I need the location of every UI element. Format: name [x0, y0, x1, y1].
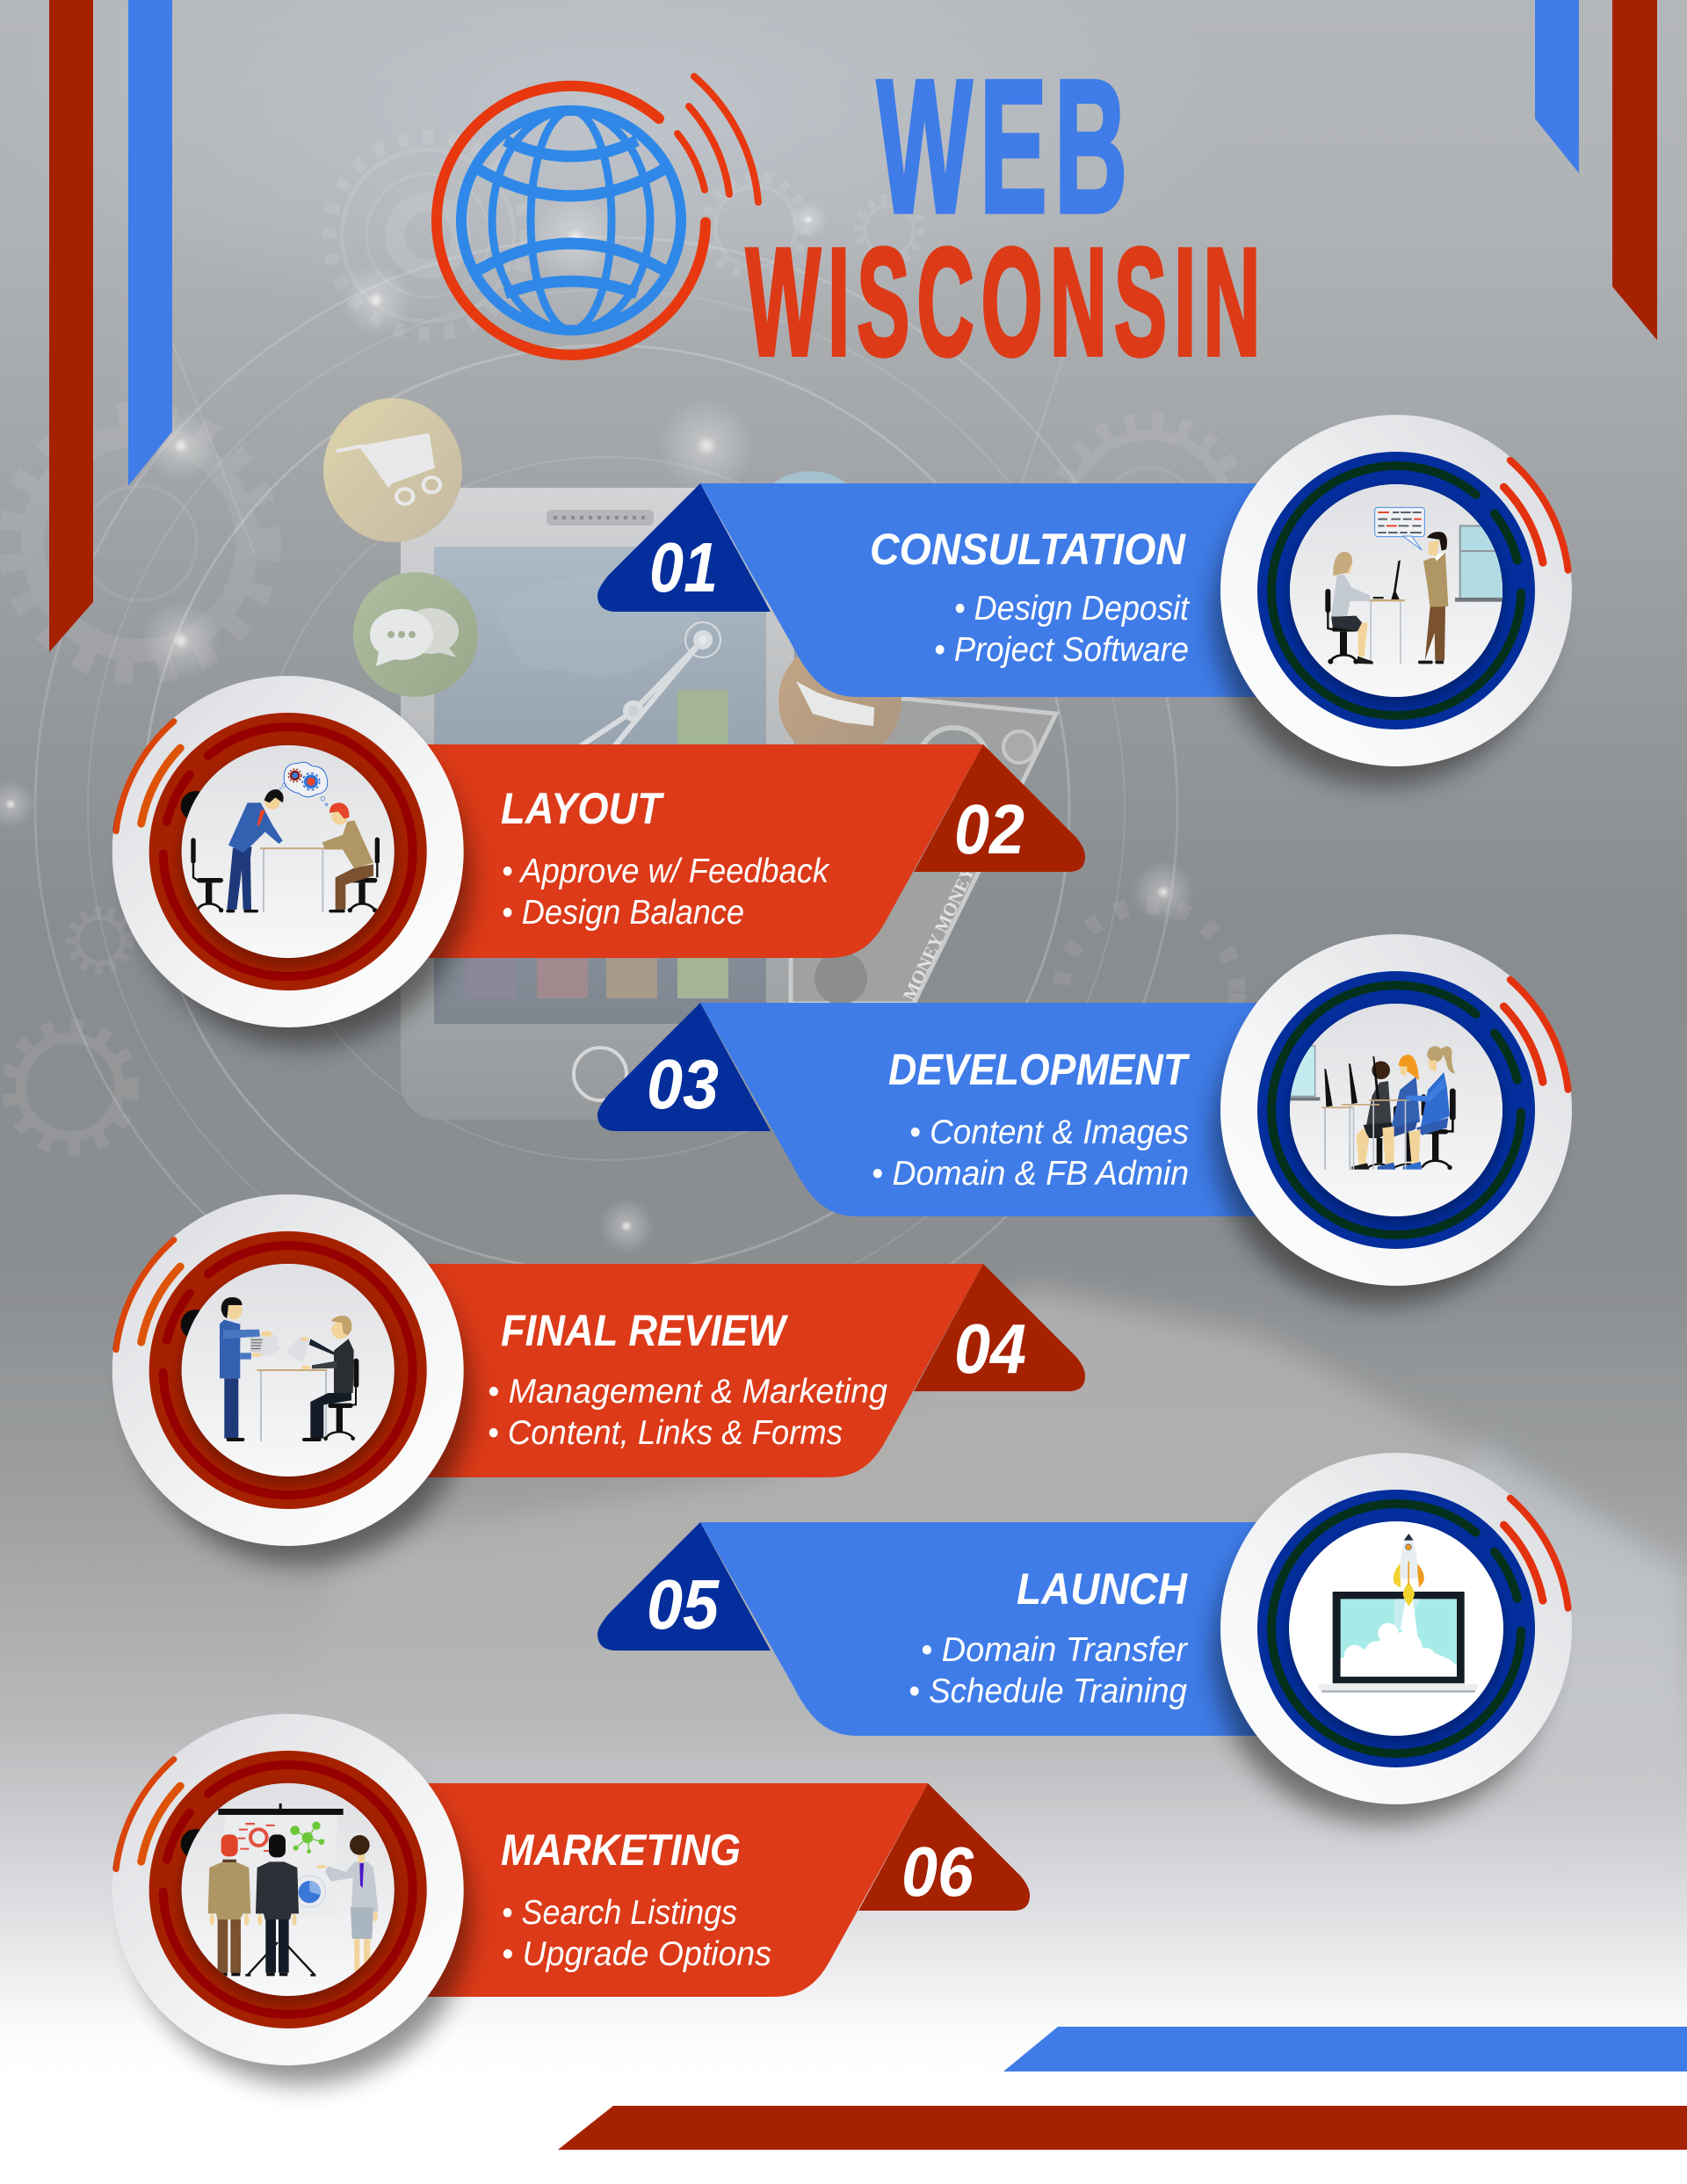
heading: LAYOUT — [501, 784, 665, 833]
heading: FINAL REVIEW — [501, 1306, 788, 1355]
banner 04: final review — [395, 1264, 1085, 1477]
background: blurred hand — [264, 1288, 1687, 1846]
red ribbon body — [340, 1783, 928, 1997]
icon plate 01: consultation scene — [1213, 415, 1572, 786]
number: 04 — [954, 1310, 1026, 1388]
banner 05: launch — [597, 1522, 1283, 1736]
bullet list: • Domain Transfer — [921, 1631, 1189, 1669]
banner 03: development — [597, 1003, 1283, 1216]
review illustration — [220, 1297, 358, 1441]
number tab — [858, 1783, 1030, 1911]
background: gears — [9, 137, 1244, 1149]
bullet list: • Approve w/ Feedback — [502, 853, 830, 890]
icon plate 06: presentation scene — [112, 1714, 471, 2085]
red ribbon — [1612, 0, 1657, 340]
handshake glyph — [796, 681, 874, 726]
inner disc — [1290, 1004, 1502, 1216]
title: WEB: WEB — [877, 40, 1135, 252]
bullet list: • Domain & FB Admin — [872, 1155, 1189, 1193]
banner 01: consultation — [597, 483, 1283, 697]
presentation illustration — [208, 1803, 379, 1977]
bullet list: • Schedule Training — [909, 1672, 1187, 1710]
inner disc — [1289, 1521, 1503, 1736]
number: 05 — [647, 1565, 720, 1643]
background: phone — [401, 488, 794, 1120]
background: concentric tech arcs — [35, 237, 1177, 1380]
heading: LAUNCH — [1017, 1564, 1188, 1614]
background: handshake coin — [778, 639, 901, 762]
bullet list — [502, 853, 830, 932]
number tab — [914, 1264, 1085, 1391]
icon plate 03: development scene — [1213, 934, 1572, 1305]
number: 02 — [954, 790, 1025, 868]
number tab — [597, 1003, 771, 1131]
signal arcs — [677, 76, 758, 202]
title: WISCONSIN: WISCONSIN — [746, 218, 1268, 388]
red ribbon — [49, 0, 93, 652]
left corner ribbons — [49, 0, 172, 652]
inner disc — [1290, 484, 1502, 697]
cart glyph — [337, 433, 440, 504]
blue ribbon — [128, 0, 172, 486]
background: blue coin — [749, 471, 872, 594]
bullet list: • Content, Links & Forms — [488, 1414, 843, 1452]
heading: MARKETING — [501, 1825, 741, 1875]
number: 03 — [647, 1045, 719, 1123]
bullet list: • Upgrade Options — [502, 1935, 771, 1973]
footer red stripe — [558, 2106, 1687, 2150]
red ribbon body — [395, 1264, 983, 1477]
bullet list: • Management & Marketing — [488, 1373, 887, 1411]
blue ribbon body — [700, 1003, 1283, 1216]
chat bubbles glyph — [370, 608, 459, 666]
outer red ring — [437, 86, 706, 355]
inner disc — [182, 745, 395, 958]
footer blue stripe — [1003, 2027, 1687, 2072]
banner 02: layout — [395, 744, 1085, 958]
number: 06 — [901, 1832, 974, 1911]
development illustration — [1289, 1046, 1456, 1170]
number tab — [914, 744, 1085, 872]
number: 01 — [649, 528, 718, 606]
number tab — [597, 483, 771, 612]
bullet list — [909, 1631, 1189, 1710]
blue ribbon body — [700, 483, 1283, 697]
bullet list: • Design Deposit — [954, 590, 1191, 628]
background: dollar bill: MONEY MONEY — [899, 863, 979, 1004]
blue globe — [461, 111, 681, 330]
right corner ribbons — [1535, 0, 1657, 340]
bullet list — [872, 1114, 1189, 1193]
red ribbon body — [395, 744, 983, 958]
bullet list — [488, 1373, 887, 1452]
background: shopping cart coin — [323, 398, 462, 542]
bullet list: • Design Balance — [502, 894, 744, 932]
background: dollar bill — [791, 699, 1056, 1005]
top background glow — [0, 0, 1230, 334]
phone screen — [434, 547, 766, 1024]
bullet list — [934, 590, 1191, 669]
bullet list — [502, 1894, 771, 1973]
icon plate 02: layout scene — [112, 676, 471, 1047]
phone screen map — [492, 575, 699, 677]
icon plate 05: rocket laptop scene — [1213, 1453, 1572, 1824]
logo: globe icon — [437, 76, 758, 355]
heading: DEVELOPMENT — [888, 1045, 1191, 1094]
consultation illustration — [1325, 507, 1505, 664]
bullet list: • Project Software — [934, 631, 1189, 669]
inner disc — [182, 1783, 395, 1996]
phone home button — [574, 1048, 626, 1100]
heading: CONSULTATION — [870, 525, 1186, 574]
phone chart bars — [466, 690, 728, 998]
phone line chart — [566, 622, 720, 756]
icon plate 04: review scene — [112, 1194, 471, 1565]
number tab — [597, 1522, 771, 1651]
background: chat coin — [353, 572, 478, 697]
blue ribbon — [1535, 0, 1579, 173]
bullet list: • Content & Images — [909, 1114, 1189, 1151]
inner disc — [182, 1264, 395, 1477]
phone speaker — [547, 510, 654, 526]
banner 06: marketing — [340, 1783, 1030, 1997]
blue ribbon body — [700, 1522, 1283, 1736]
laptop rocket illustration — [1319, 1534, 1478, 1693]
background: sparkles — [0, 194, 1195, 1254]
bullet list: • Search Listings — [502, 1894, 737, 1932]
layout illustration — [191, 762, 380, 912]
